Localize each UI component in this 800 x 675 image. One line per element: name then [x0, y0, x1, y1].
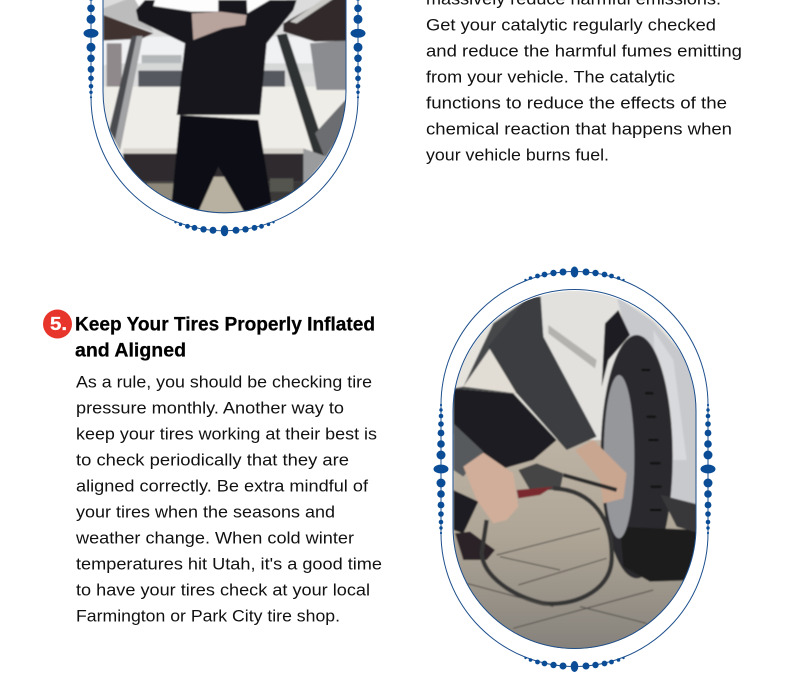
text block: tire pressure paragraph: keep your tires working at their best is: [76, 424, 377, 444]
text block: catalytic converter paragraph: your vehicle burns fuel.: [426, 146, 609, 164]
text block: tire pressure paragraph: temperatures hit Utah, it's a good time: [76, 554, 382, 574]
text block: catalytic converter paragraph: [426, 0, 742, 164]
text block: catalytic converter paragraph: chemical reaction that happens when: [426, 120, 732, 138]
photo: mechanic checking tire pressure: [450, 288, 700, 653]
text block: tire pressure paragraph: [75, 372, 382, 626]
text block: tire pressure paragraph: Farmington or Park City tire shop.: [76, 606, 340, 626]
text block: tire pressure paragraph: pressure monthly. Another way to: [76, 398, 344, 418]
heading: keep your tires properly inflated and aligned: [75, 314, 375, 362]
text block: tire pressure paragraph: aligned correctly. Be extra mindful of: [76, 476, 368, 496]
text block: catalytic converter paragraph: from your vehicle. The catalytic: [426, 68, 676, 86]
number badge 5: [43, 310, 72, 338]
heading: keep your tires properly inflated and aligned: Keep Your Tires Properly Inflated: [75, 314, 375, 336]
photo: mechanic standing under a car lift: [100, 0, 350, 220]
text block: catalytic converter paragraph: and reduce the harmful fumes emitting: [426, 42, 742, 60]
heading: keep your tires properly inflated and aligned: and Aligned: [75, 340, 186, 362]
number badge 5: 5.: [50, 314, 67, 334]
text block: tire pressure paragraph: to check periodically that they are: [76, 450, 349, 470]
ornamental oval frame: top photo: [84, 0, 366, 236]
text block: tire pressure paragraph: As a rule, you should be checking tire: [76, 372, 372, 392]
text block: catalytic converter paragraph: Get your catalytic regularly checked: [426, 16, 716, 34]
text block: tire pressure paragraph: your tires when the seasons and: [76, 502, 335, 522]
text block: tire pressure paragraph: weather change. When cold winter: [75, 528, 354, 548]
ornamental oval frame: bottom photo: [434, 266, 716, 672]
text block: tire pressure paragraph: to have your tires check at your local: [76, 580, 370, 600]
text block: catalytic converter paragraph: functions to reduce the effects of the: [426, 94, 727, 112]
